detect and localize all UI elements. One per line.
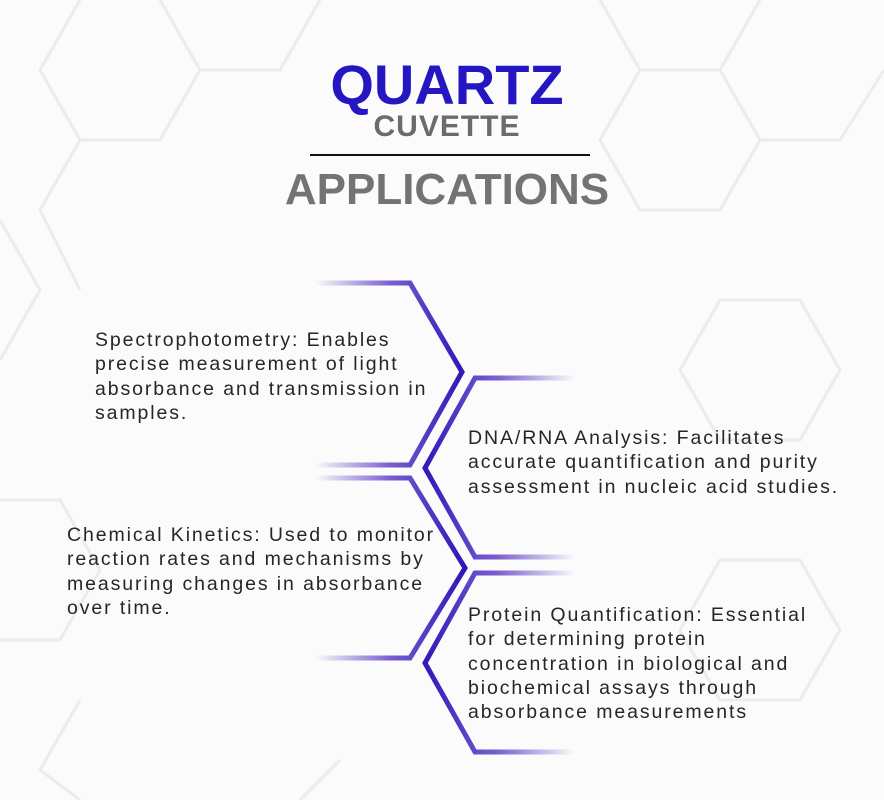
text: Protein Quantification: concentration in biological and bbox=[468, 653, 789, 675]
text: Protein Quantification: Protein Quantification: Essential bbox=[468, 604, 807, 626]
heading: APPLICATIONS: APPLICATIONS bbox=[285, 165, 609, 214]
text: Chemical Kinetics: over time. bbox=[67, 597, 172, 619]
title: QUARTZ: QUARTZ bbox=[330, 53, 564, 116]
text: DNA/RNA Analysis: DNA/RNA Analysis: Facilitates bbox=[468, 427, 785, 449]
text: Spectrophotometry: Spectrophotometry: Enables bbox=[95, 329, 390, 351]
text: DNA/RNA Analysis bbox=[468, 427, 839, 498]
text: Protein Quantification bbox=[468, 604, 807, 723]
text: Chemical Kinetics: reaction rates and mechanisms by bbox=[67, 548, 425, 570]
text: Chemical Kinetics: Chemical Kinetics: Used to monitor bbox=[67, 524, 435, 546]
subtitle: CUVETTE: CUVETTE bbox=[373, 110, 520, 143]
text: Chemical Kinetics: measuring changes in absorbance bbox=[67, 573, 424, 595]
text: Spectrophotometry: samples. bbox=[95, 402, 188, 424]
text: Spectrophotometry: precise measurement of light bbox=[95, 353, 399, 375]
text: Chemical Kinetics bbox=[67, 524, 435, 619]
text: Protein Quantification: for determining protein bbox=[468, 628, 707, 650]
text: Spectrophotometry: absorbance and transmission in bbox=[95, 378, 427, 400]
text: DNA/RNA Analysis: accurate quantification and purity bbox=[468, 451, 819, 473]
text: Spectrophotometry bbox=[95, 329, 427, 424]
text: Protein Quantification: biochemical assays through bbox=[468, 677, 758, 699]
text: Protein Quantification: absorbance measurements bbox=[468, 701, 748, 723]
text: DNA/RNA Analysis: assessment in nucleic acid studies. bbox=[468, 476, 839, 498]
